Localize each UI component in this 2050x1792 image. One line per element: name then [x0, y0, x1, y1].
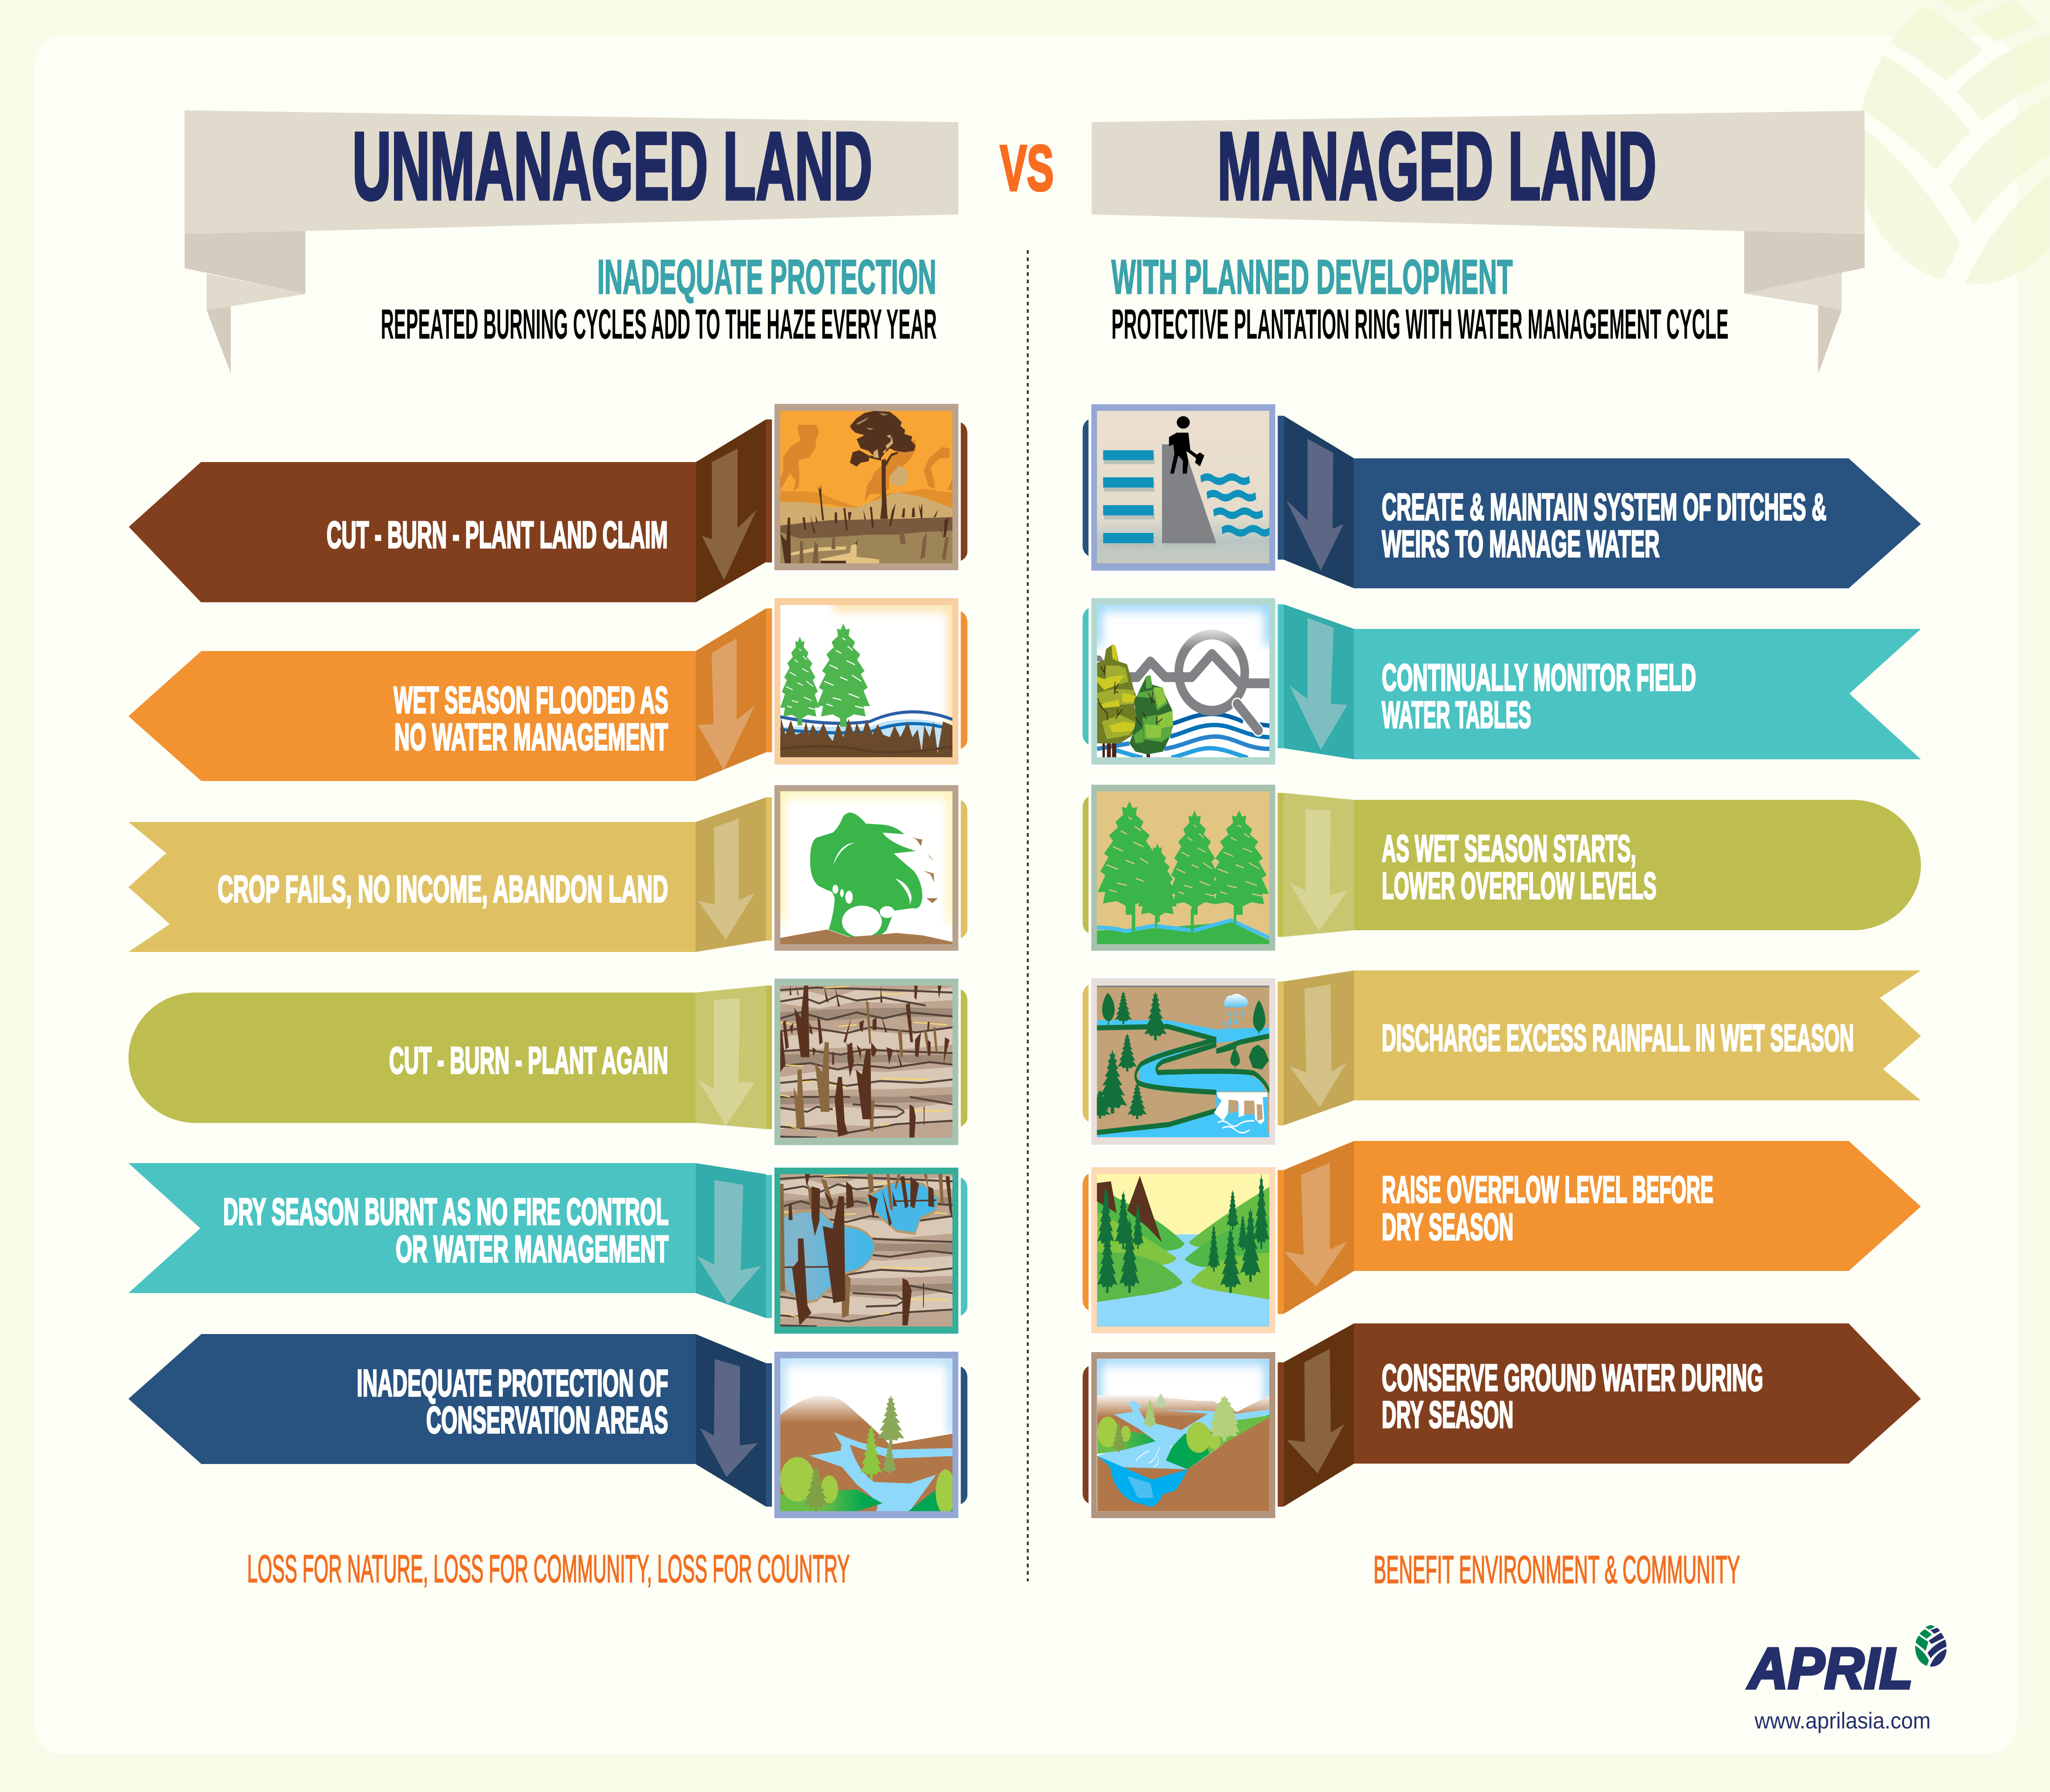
subheading: with planned development: WITH PLANNED DEVELOPMENT	[1112, 250, 1513, 304]
right row 1 ribbon: ditches and weirs	[1083, 416, 1921, 588]
label: WATER TABLES	[1382, 693, 1531, 736]
icon: down arrow	[698, 998, 755, 1126]
left row 1 ribbon: cut burn plant land claim	[129, 419, 967, 602]
label: AS WET SEASON STARTS,	[1382, 827, 1636, 870]
icon: down arrow	[697, 1180, 761, 1304]
website url: www.aprilasia.com	[1754, 1708, 1931, 1733]
icon: down arrow	[1286, 439, 1344, 571]
label: DISCHARGE EXCESS RAINFALL IN WET SEASON	[1382, 1016, 1854, 1059]
picture frame: green trees	[1089, 782, 1277, 953]
right title banner	[1092, 111, 1865, 374]
watermark leaf	[1859, 0, 2050, 285]
left row 2 ribbon: wet season flooded	[128, 608, 967, 781]
icon: down arrow	[1287, 1349, 1345, 1473]
icon: down arrow	[1289, 984, 1346, 1107]
icon: down arrow	[698, 638, 755, 770]
label: NO WATER MANAGEMENT	[394, 715, 668, 758]
picture frame: river with weir	[1089, 976, 1277, 1147]
vs label: VS	[1000, 132, 1054, 204]
right row 5 ribbon: raise overflow level	[1083, 1141, 1921, 1314]
label	[1382, 827, 1656, 907]
icon: leaf	[1915, 1625, 1946, 1667]
footer text: loss for nature: LOSS FOR NATURE, LOSS FOR COMMUNITY, LOSS FOR COUNTRY	[247, 1547, 850, 1590]
picture frame: burnt land with pools	[772, 1165, 961, 1336]
heading: managed land: MANAGED LAND	[1217, 113, 1656, 220]
picture frame: dry cracked land	[772, 976, 961, 1148]
label	[394, 679, 668, 758]
label: LOWER OVERFLOW LEVELS	[1382, 864, 1656, 907]
footer text: benefit environment: BENEFIT ENVIRONMENT & COMMUNITY	[1374, 1548, 1740, 1591]
label: WET SEASON FLOODED AS	[394, 679, 668, 721]
logo: april: APRIL	[1747, 1637, 1913, 1701]
picture frame: flooded trees	[772, 596, 961, 767]
logo: april	[1747, 1625, 1946, 1733]
icon: down arrow	[698, 819, 755, 940]
icon: down arrow	[1289, 618, 1347, 750]
label: CROP FAILS, NO INCOME, ABANDON LAND	[218, 868, 668, 910]
label	[223, 1190, 669, 1270]
left row 5 ribbon: dry season burnt	[128, 1163, 967, 1318]
label: CONTINUALLY MONITOR FIELD	[1382, 656, 1696, 699]
label: INADEQUATE PROTECTION OF	[357, 1362, 668, 1404]
right row 2 ribbon: monitor water tables	[1083, 604, 1921, 759]
left row 4 ribbon: cut burn plant again	[128, 986, 967, 1129]
picture frame: lake and ground water	[1089, 1350, 1277, 1521]
subheading: inadequate protection: INADEQUATE PROTECTION	[597, 250, 936, 304]
label	[1382, 1356, 1763, 1436]
centre dotted divider	[1027, 250, 1029, 1581]
label: CREATE & MAINTAIN SYSTEM OF DITCHES &	[1382, 485, 1827, 528]
left row 3 ribbon: crop fails	[128, 797, 967, 952]
icon: down arrow	[700, 1359, 758, 1477]
label	[1382, 485, 1827, 565]
picture frame: river and hills	[772, 1349, 961, 1521]
icon: down arrow	[1289, 809, 1347, 931]
left row 6 ribbon: inadequate protection of conservation areas	[128, 1334, 967, 1507]
subtitle: protective plantation ring: PROTECTIVE PLANTATION RING WITH WATER MANAGEMENT CYCLE	[1112, 300, 1729, 348]
picture frame: burning land	[772, 401, 961, 573]
left title banner	[184, 110, 958, 373]
label	[1382, 1168, 1713, 1248]
label: CONSERVATION AREAS	[426, 1398, 668, 1441]
label: CUT - BURN - PLANT AGAIN	[389, 1039, 668, 1082]
label: CUT - BURN - PLANT LAND CLAIM	[327, 513, 668, 556]
label: RAISE OVERFLOW LEVEL BEFORE	[1382, 1168, 1713, 1211]
label: OR WATER MANAGEMENT	[396, 1227, 669, 1270]
subtitle: repeated burning cycles: REPEATED BURNING CYCLES ADD TO THE HAZE EVERY YEAR	[381, 301, 937, 348]
heading: unmanaged land: UNMANAGED LAND	[352, 113, 872, 220]
right row 3 ribbon: lower overflow levels	[1083, 793, 1921, 937]
picture frame: monitor water table	[1089, 596, 1277, 767]
picture frame: ditches and dam	[1089, 402, 1277, 573]
right row 6 ribbon: conserve ground water	[1083, 1323, 1921, 1507]
label: DRY SEASON	[1382, 1393, 1513, 1436]
right row 4 ribbon: discharge excess rainfall	[1083, 970, 1921, 1125]
icon: down arrow	[702, 449, 757, 580]
picture frame: wind blown tree	[772, 783, 961, 953]
label: DRY SEASON BURNT AS NO FIRE CONTROL	[223, 1190, 669, 1233]
picture frame: valley with river	[1089, 1165, 1277, 1336]
icon: down arrow	[1284, 1163, 1347, 1287]
label: DRY SEASON	[1382, 1205, 1513, 1248]
label	[357, 1362, 668, 1441]
label	[1382, 656, 1696, 736]
label: CONSERVE GROUND WATER DURING	[1382, 1356, 1763, 1399]
label: WEIRS TO MANAGE WATER	[1382, 522, 1660, 565]
